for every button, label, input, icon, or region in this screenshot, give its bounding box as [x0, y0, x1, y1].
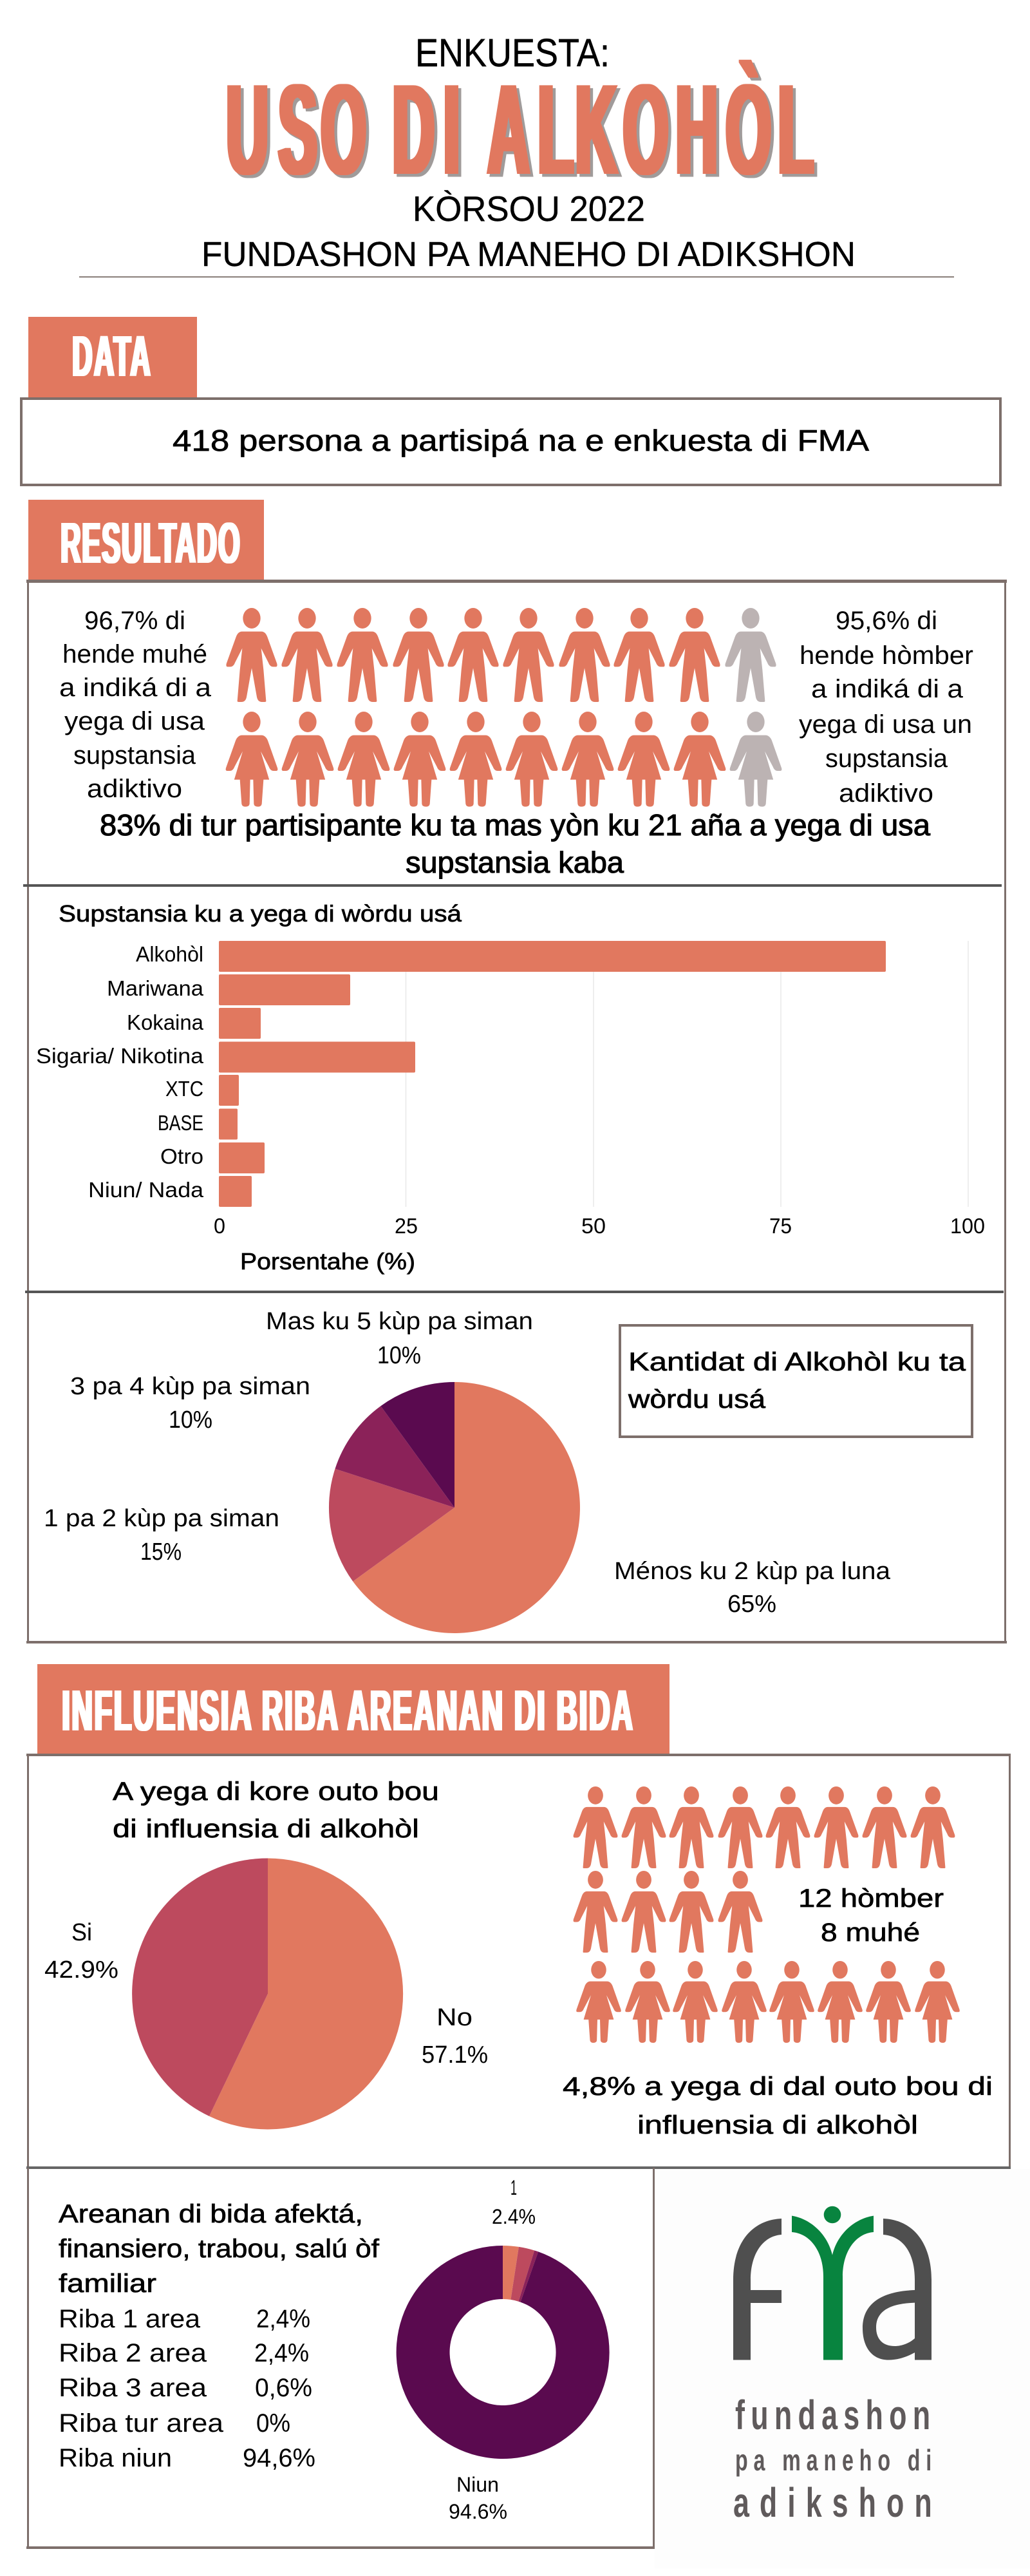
text block: areas of life: Riba niun — [59, 2444, 172, 2472]
pie heading: di influensia di alkohòl — [113, 1815, 419, 1843]
pie labels: 57.1% — [422, 2041, 488, 2069]
text block: areas of life: 0,6% — [255, 2374, 312, 2402]
axis title: Porsentahe (%) — [240, 1248, 415, 1274]
text block: areas of life: Riba 1 area — [59, 2305, 201, 2333]
pie labels: No — [436, 2004, 473, 2031]
callout box: Kantidat di Alkohòl: wòrdu usá — [628, 1385, 766, 1414]
heading: INFLUENSIA RIBA AREANAN DI BIDA: INFLUENSIA RIBA AREANAN DI BIDA — [62, 1679, 633, 1743]
donut labels: 1 — [510, 2176, 517, 2199]
axis ticks: 75 — [769, 1214, 792, 1238]
heading: RESULTADO — [28, 500, 264, 580]
panel: data statement: 418 persona a partisipá na e enkuesta di FMA — [173, 424, 869, 457]
text: women percentage — [59, 607, 212, 803]
icons: 8 women — [576, 1961, 960, 2043]
callout: 83% statement — [100, 808, 930, 879]
icons: 12 men — [574, 1786, 955, 1953]
callout: 83% statement: supstansia kaba — [406, 846, 624, 879]
heading: DATA — [28, 317, 197, 397]
text: women percentage: supstansia — [73, 741, 196, 770]
text: women percentage: 96,7% di — [84, 607, 185, 635]
logo wordmark — [733, 2392, 932, 2526]
donut labels: Niun — [456, 2473, 499, 2496]
text block: areas of life: familiar — [59, 2269, 156, 2298]
axis ticks: 25 — [395, 1214, 418, 1238]
logo wordmark: adikshon — [733, 2479, 932, 2526]
text block: areas of life: Riba 3 area — [59, 2374, 207, 2402]
callout box: Kantidat di Alkohòl: Kantidat di Alkohòl ku ta — [628, 1348, 966, 1376]
pie labels — [44, 1308, 891, 1618]
category labels: Niun/ Nada — [88, 1178, 204, 1202]
text block: areas of life: Riba 2 area — [59, 2339, 207, 2367]
logo wordmark: pa maneho di — [735, 2444, 932, 2477]
pie heading: A yega di kore outo bou — [113, 1777, 439, 1806]
text: men percentage: supstansia — [825, 744, 948, 773]
pie labels: 15% — [140, 1539, 182, 1566]
category labels: Sigaria/ Nikotina — [36, 1044, 204, 1068]
callout: 4,8% statement: 4,8% a yega di dal outo bou di — [563, 2072, 993, 2101]
category labels: XTC — [165, 1077, 203, 1101]
text block: areas of life: 2,4% — [254, 2339, 309, 2367]
text: 12 hòmber 8 muhé — [798, 1884, 944, 1947]
pie labels: 65% — [727, 1591, 776, 1618]
text block: areas of life: 94,6% — [243, 2444, 315, 2472]
text: women percentage: adiktivo — [87, 775, 182, 803]
axis ticks — [214, 1214, 985, 1238]
donut labels — [449, 2176, 536, 2523]
logo wordmark: fundashon — [735, 2392, 930, 2438]
text: 12 hòmber 8 muhé: 12 hòmber — [798, 1884, 944, 1913]
bar chart: substances — [36, 900, 985, 1274]
axis ticks: 0 — [214, 1214, 225, 1238]
chart title: Supstansia ku a yega di wòrdu usá — [59, 900, 462, 927]
text: women percentage: a indiká di a — [59, 674, 212, 702]
text: men percentage — [799, 607, 973, 808]
axis ticks: 50 — [581, 1214, 606, 1238]
pie heading — [113, 1777, 439, 1843]
category labels: BASE — [158, 1111, 203, 1135]
category labels: Otro — [160, 1144, 203, 1168]
pie labels — [44, 1919, 488, 2069]
panel: logo background — [655, 2169, 1030, 2568]
logo mark — [733, 2206, 932, 2360]
text: men percentage: yega di usa un — [799, 710, 972, 739]
text: men percentage: hende hòmber — [800, 641, 973, 670]
title block: FUNDASHON PA MANEHO DI ADIKSHON — [201, 235, 856, 274]
text: men percentage: a indiká di a — [811, 675, 964, 703]
callout box: Kantidat di Alkohòl — [620, 1325, 972, 1437]
text block: areas of life: Riba tur area — [59, 2409, 224, 2438]
icons: row of men — [226, 608, 776, 702]
logo: fundashon pa maneho di adikshon — [733, 2206, 932, 2526]
category labels: Mariwana — [107, 976, 204, 1000]
axis ticks: 100 — [950, 1214, 985, 1238]
heading: DATA: DATA — [72, 323, 151, 388]
pie labels: 1 pa 2 kùp pa siman — [44, 1505, 279, 1532]
bars — [219, 941, 886, 1207]
panel frame: areanan di bida — [26, 2168, 655, 2549]
panel frame: influensia — [26, 1754, 1011, 2169]
text: women percentage: hende muhé — [62, 640, 207, 668]
pie labels: 10% — [377, 1342, 421, 1369]
pie chart: kore outo bou — [44, 1858, 488, 2129]
text: men percentage: 95,6% di — [836, 607, 937, 635]
pie labels: 10% — [169, 1406, 212, 1434]
callout: 4,8% statement — [563, 2072, 993, 2139]
text block: areas of life: finansiero, trabou, salú òf — [59, 2235, 380, 2263]
pie labels: Ménos ku 2 kùp pa luna — [614, 1558, 891, 1585]
title block — [201, 31, 856, 274]
text block: areas of life: 0% — [256, 2409, 290, 2438]
category labels: Alkohòl — [136, 942, 203, 966]
pie labels: 42.9% — [44, 1956, 118, 1984]
heading: RESULTADO: RESULTADO — [61, 510, 240, 575]
category labels — [36, 942, 204, 1202]
text: men percentage: adiktivo — [839, 779, 933, 808]
main title: USO DI ALKOHÒL: USO DI ALKOHÒL — [227, 57, 814, 202]
donut labels: 2.4% — [492, 2205, 536, 2228]
panel: data statement — [21, 399, 1000, 485]
text: 12 hòmber 8 muhé: 8 muhé — [821, 1918, 920, 1947]
text block: areas of life — [59, 2200, 380, 2472]
donut chart: affected areas — [397, 2176, 610, 2523]
heading: INFLUENSIA RIBA AREANAN DI BIDA — [37, 1664, 670, 1754]
panel frame: resultado — [26, 580, 1007, 1643]
pie labels: 3 pa 4 kùp pa siman — [70, 1373, 310, 1400]
pie labels: Mas ku 5 kùp pa siman — [266, 1308, 533, 1335]
donut labels: 94.6% — [449, 2500, 507, 2523]
pie labels: Si — [71, 1919, 92, 1946]
title block: ENKUESTA: — [415, 31, 610, 75]
category labels: Kokaina — [127, 1010, 204, 1034]
icons: row of women — [226, 712, 782, 807]
text block: areas of life: Areanan di bida afektá, — [59, 2200, 363, 2228]
text: women percentage: yega di usa — [64, 707, 205, 735]
text block: areas of life: 2,4% — [256, 2305, 310, 2333]
title block: KÒRSOU 2022 — [413, 189, 645, 229]
callout: 4,8% statement: influensia di alkohòl — [637, 2111, 918, 2139]
pie chart: alcohol quantity — [44, 1308, 891, 1633]
callout: 83% statement: 83% di tur partisipante ku ta mas yòn ku 21 aña a yega di usa — [100, 808, 930, 842]
